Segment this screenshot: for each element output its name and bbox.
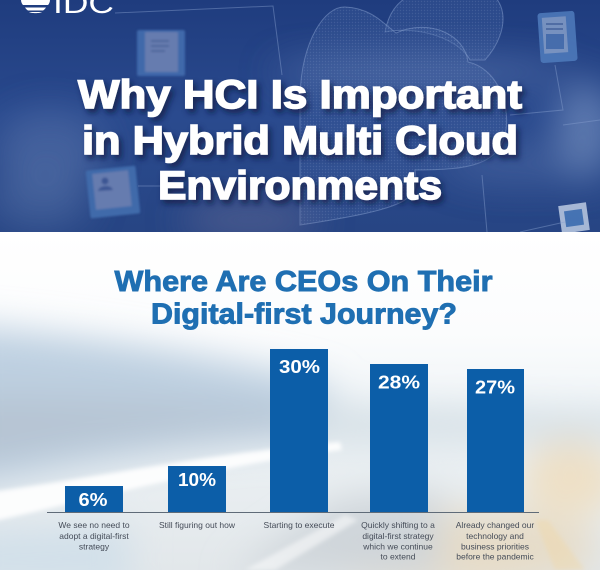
icon: user card	[86, 166, 140, 218]
icon: document card	[137, 30, 185, 76]
bar: 30%: 30%	[279, 356, 320, 377]
label: 27% category: business priorities	[461, 542, 529, 552]
background haze	[0, 59, 600, 238]
bar: 6%	[65, 486, 123, 513]
bar chart	[47, 349, 539, 513]
logo mark	[21, 0, 50, 13]
bar: 30%	[270, 349, 328, 513]
label: 27% category: before the pandemic	[456, 552, 534, 562]
bar: 10%	[168, 466, 226, 513]
chart heading: Digital-first Journey?	[151, 298, 457, 330]
label: 28% category: to extend	[381, 552, 416, 562]
chart baseline	[47, 512, 539, 513]
label: 30% category: Starting to execute	[264, 520, 335, 530]
label: 10% category: Still figuring out how	[159, 520, 236, 530]
chart heading: Where Are CEOs On Their	[114, 266, 492, 298]
category labels	[58, 520, 534, 562]
label: 6% category: adopt a digital-first	[59, 531, 129, 541]
title: Why HCI Is Important	[78, 73, 522, 117]
label: 28% category: digital-first strategy	[362, 531, 434, 541]
bar: 27%: 27%	[475, 376, 515, 398]
bar: 10%: 10%	[178, 469, 216, 490]
network lines	[115, 6, 600, 232]
bar: 28%	[370, 364, 428, 513]
panel: chart background	[0, 270, 600, 570]
panel: header banner	[0, 0, 600, 238]
background light streaks	[0, 325, 600, 570]
label: 28% category: Quickly shifting to a	[361, 520, 435, 530]
icon: device card	[558, 202, 590, 234]
bar: 27%	[467, 369, 524, 513]
cloud illustration	[300, 0, 507, 225]
icon: tablet card	[537, 11, 578, 63]
label: 27% category: Already changed our	[456, 520, 534, 530]
label: 28% category: which we continue	[362, 542, 433, 552]
title: Environments	[158, 164, 442, 208]
chart heading	[114, 266, 492, 330]
label: 27% category: technology and	[466, 531, 524, 541]
title	[78, 73, 522, 208]
label: 6% category: strategy	[79, 542, 110, 552]
bar: 28%: 28%	[378, 372, 420, 392]
title: in Hybrid Multi Cloud	[82, 119, 518, 163]
logo: IDC	[21, 0, 112, 14]
label: 6% category: We see no need to	[58, 520, 130, 530]
bar: 6%: 6%	[78, 489, 108, 510]
